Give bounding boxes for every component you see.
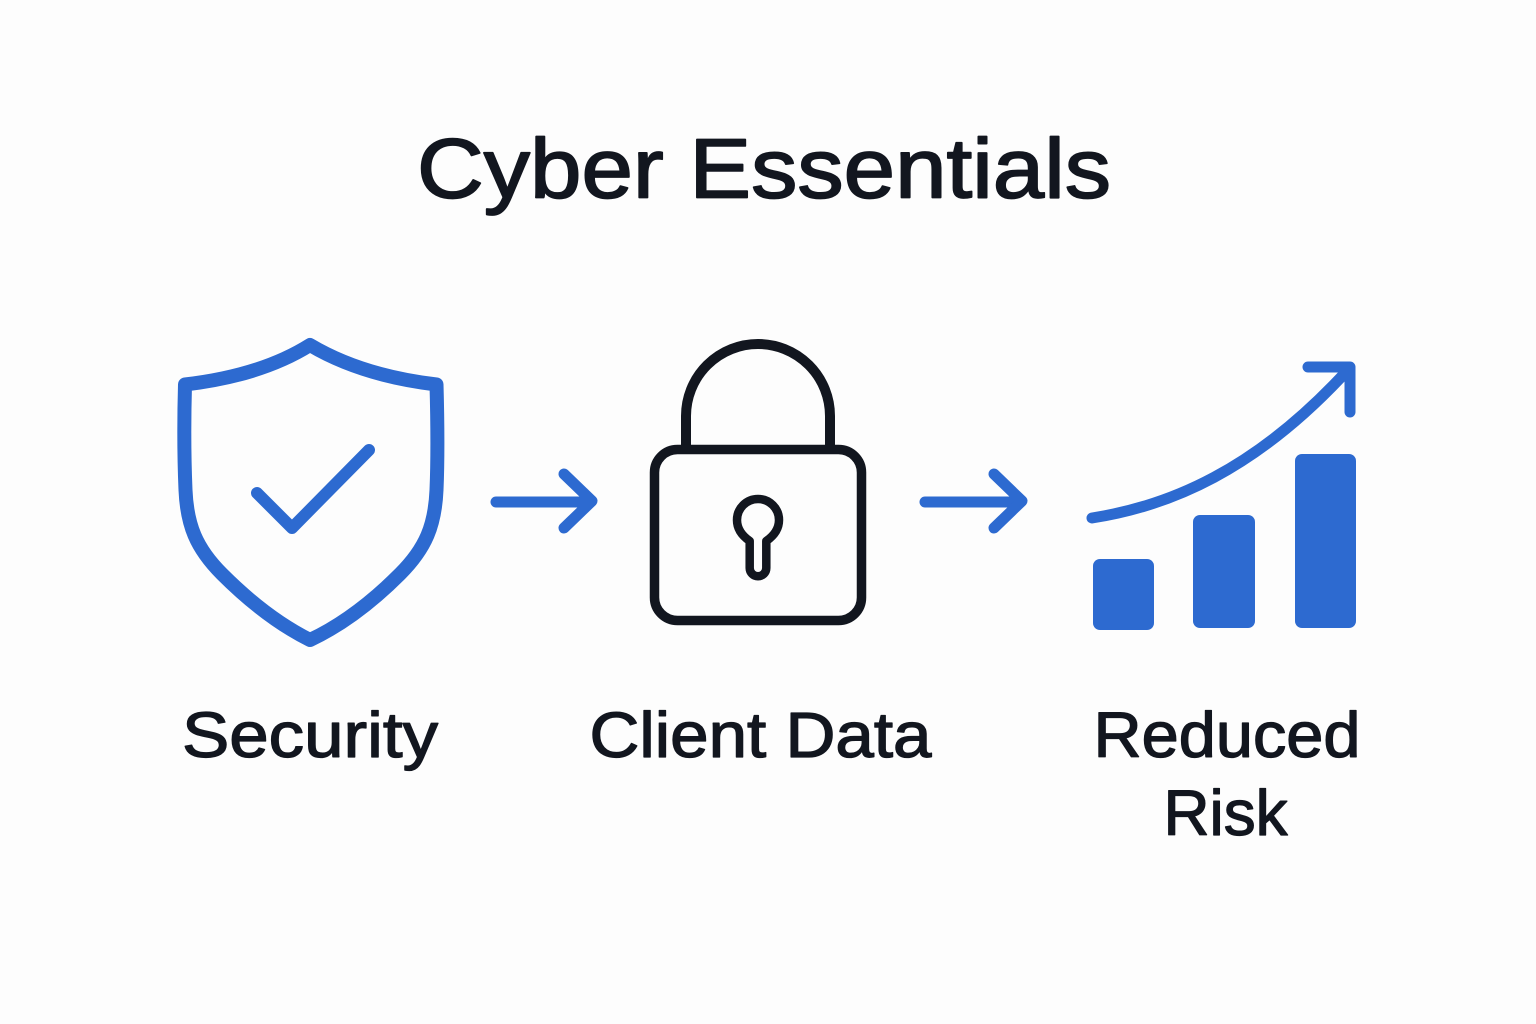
trend arrow [1092, 367, 1350, 518]
label: client data: Client Data [590, 699, 932, 771]
label: reduced risk [1094, 699, 1360, 849]
icon: padlock [654, 344, 862, 620]
label: reduced risk: Reduced [1094, 699, 1360, 771]
arrow: security to client data [496, 474, 592, 528]
bars [1093, 454, 1356, 630]
arrow: client data to reduced risk [925, 474, 1022, 528]
icon: rising bar chart with arrow [1092, 367, 1356, 630]
title: Cyber Essentials [417, 122, 1111, 216]
icon: shield with checkmark [184, 345, 437, 640]
label: reduced risk: Risk [1164, 777, 1288, 849]
label: security: Security [182, 699, 438, 771]
